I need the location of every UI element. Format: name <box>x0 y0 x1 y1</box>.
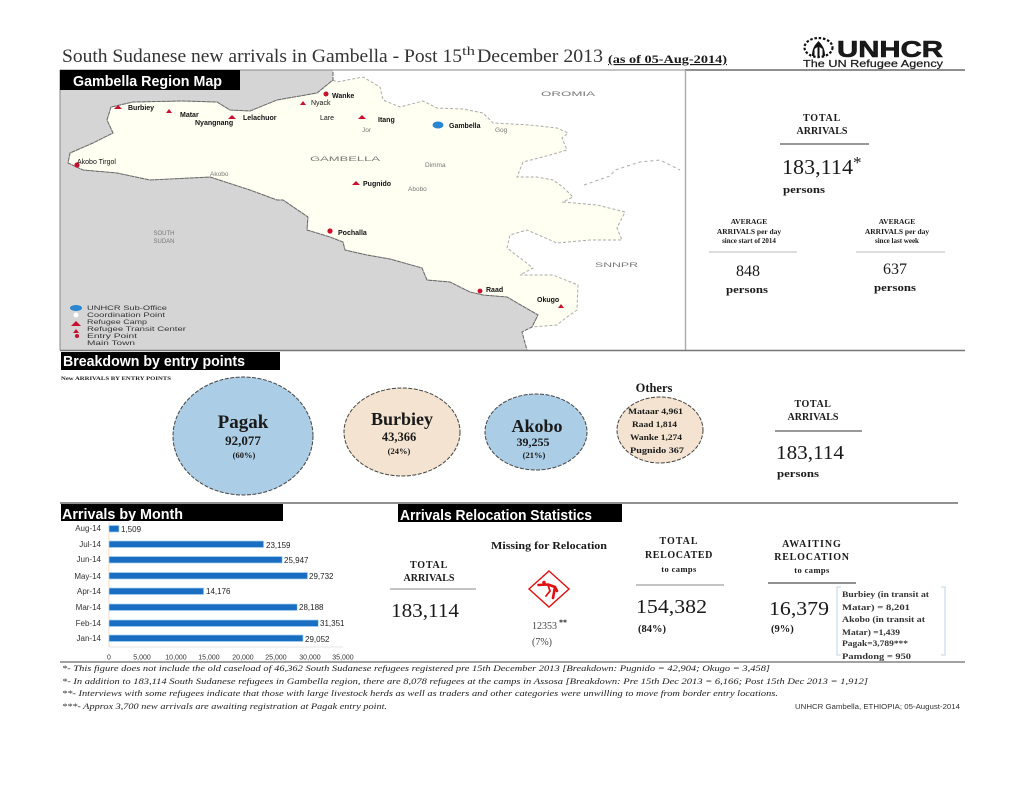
bar: Jan-14 <box>77 634 330 644</box>
map legend: Entry Point <box>87 334 138 340</box>
footnotes: *- This figure does not include the old caseload of 46,362 South Sudanese refugees registered pre 15th December 2013 [Breakdown: Pugnido = 42,904; Okugo = 3,458] <box>62 663 770 673</box>
map: place labels: SUDAN <box>153 239 175 245</box>
bubble: Burbiey <box>344 388 460 476</box>
bar: Jan-14: 29,052 <box>305 635 330 644</box>
panel: average arrivals since last week: persons <box>874 283 916 294</box>
map: place labels: Itang <box>378 117 395 124</box>
title <box>62 43 727 67</box>
heading: Arrivals Relocation Statistics: Arrivals Relocation Statistics <box>400 507 592 524</box>
panel: awaiting relocation: (9%) <box>771 624 794 635</box>
map: place labels: Gambella <box>449 123 481 130</box>
callout: awaiting relocation breakdown: Pamdong = 950 <box>842 651 911 661</box>
panel: total relocated <box>636 536 724 635</box>
map: place labels: Nyack <box>311 100 331 107</box>
map legend: Coordination Point <box>87 313 166 319</box>
map: place labels: GAMBELLA <box>310 156 381 163</box>
panel: total relocated: to camps <box>661 564 697 574</box>
panel: average arrivals since last week: AVERAGE <box>879 217 915 226</box>
map: place labels: Raad <box>486 287 503 294</box>
icon: UNHCR emblem <box>804 38 832 57</box>
map: place labels: OROMIA <box>541 91 596 98</box>
icon: UNHCR office marker <box>432 122 444 128</box>
bar: Feb-14: 31,351 <box>320 619 345 628</box>
map: place labels: Burbiey <box>128 105 154 112</box>
bar: Jun-14: Jun-14 <box>77 555 102 564</box>
bar chart: arrivals by month <box>74 522 354 662</box>
map frame rules <box>60 70 965 350</box>
map: place labels: Gog <box>495 127 508 134</box>
bar: Apr-14: 14,176 <box>206 587 231 596</box>
callout: awaiting relocation breakdown: Burbiey (in transit at <box>842 589 929 599</box>
panel: total arrivals summary <box>780 113 869 196</box>
map: place labels: Matar <box>180 112 199 119</box>
panel: average arrivals since start of 2014: since start of 2014 <box>722 237 776 245</box>
chart axis labels: 20,000 <box>232 654 254 662</box>
panel: missing for relocation: Missing for Relocation <box>491 541 608 552</box>
title: th <box>462 43 476 58</box>
callout: awaiting relocation breakdown: Matar) = 8,201 <box>842 602 910 612</box>
panel: average arrivals since start of 2014: persons <box>726 285 768 296</box>
bar: May-14: 29,732 <box>309 572 334 581</box>
map: place labels: Lare <box>320 115 334 122</box>
map legend <box>70 305 186 347</box>
bar: Aug-14: Aug-14 <box>75 524 102 533</box>
map legend: Main Town <box>87 341 135 347</box>
chart axis labels: 35,000 <box>332 654 354 662</box>
panel: total relocated: (84%) <box>638 624 666 635</box>
panel: Gambella region map <box>60 70 685 350</box>
panel: awaiting relocation: AWAITING <box>782 539 842 550</box>
bar: Jan-14: Jan-14 <box>77 634 102 643</box>
footnotes <box>62 663 868 711</box>
title: (as of 05-Aug-2014) <box>608 54 727 66</box>
panel: breakdown total arrivals: TOTAL <box>794 399 832 410</box>
map: place labels: Akobo Tirgol <box>77 159 116 166</box>
panel: average arrivals since last week: since last week <box>875 237 919 245</box>
panel: breakdown total arrivals: ARRIVALS <box>788 412 839 423</box>
bubble: Others: Wanke 1,274 <box>630 432 683 442</box>
heading: Gambella Region Map: Gambella Region Map <box>73 73 222 90</box>
bubble: Akobo: (21%) <box>523 450 545 460</box>
panel: missing for relocation: 12353 <box>532 621 557 632</box>
bubble: Others: Raad 1,814 <box>632 419 678 429</box>
title: December 2013 <box>477 46 603 67</box>
map: place labels: Pugnido <box>363 181 391 188</box>
panel: average arrivals since last week: 637 <box>883 261 907 278</box>
footnotes: ***- Approx 3,700 new arrivals are awaiting registration at Pagak entry point. <box>62 701 387 711</box>
map: place markers <box>74 92 564 308</box>
panel: awaiting relocation: 16,379 <box>769 598 829 620</box>
bar: Jun-14: 25,947 <box>284 556 309 565</box>
panel: breakdown total arrivals: persons <box>777 469 819 480</box>
panel: total arrivals summary: 183,114 <box>782 155 854 179</box>
map: place labels: Jor <box>362 127 372 134</box>
map: place labels: Akobo <box>210 171 229 178</box>
panel: breakdown total arrivals: 183,114 <box>776 442 844 464</box>
bubble: Burbiey: (24%) <box>388 446 410 456</box>
bubble: Pagak: (60%) <box>233 450 255 460</box>
bubble: Akobo <box>485 394 587 470</box>
panel: missing for relocation: (7%) <box>532 637 552 648</box>
heading: Breakdown by entry points: Breakdown by entry points <box>63 353 245 370</box>
panel: breakdown total arrivals <box>775 399 862 480</box>
panel: total arrivals summary: ARRIVALS <box>797 126 848 137</box>
panel: total arrivals summary: persons <box>783 185 825 196</box>
panel: awaiting relocation <box>768 539 856 635</box>
chart axis labels: 30,000 <box>299 654 321 662</box>
panel: average arrivals since last week <box>856 217 945 294</box>
callout: awaiting relocation breakdown: Pagak=3,789*** <box>842 638 908 648</box>
bar: May-14: May-14 <box>74 572 102 581</box>
title: South Sudanese new arrivals in Gambella - Post 15 <box>62 46 462 67</box>
chart axis labels: 15,000 <box>198 654 220 662</box>
bar: Jul-14: Jul-14 <box>79 540 102 549</box>
panel: missing for relocation <box>491 541 608 648</box>
panel: total relocated: TOTAL <box>659 536 699 547</box>
bar: Feb-14 <box>76 619 345 628</box>
chart axis labels: 0 <box>107 654 111 662</box>
map: place labels: Dimma <box>425 162 446 169</box>
panel: total relocated: RELOCATED <box>645 550 713 561</box>
chart axis labels: 25,000 <box>265 654 287 662</box>
map: neighbouring boundary <box>584 160 680 185</box>
bar: Jun-14 <box>77 555 309 565</box>
credit line: UNHCR Gambella, ETHIOPIA; 05-August-2014 <box>795 704 960 711</box>
panel: relocation total arrivals: TOTAL <box>410 560 448 571</box>
heading: Arrivals by Month: Arrivals by Month <box>62 506 183 523</box>
logo: UNHCR: UNHCR <box>837 36 943 62</box>
map: place labels: Okugo <box>537 297 559 304</box>
bar: Jul-14: 23,159 <box>266 541 291 550</box>
panel: relocation total arrivals: ARRIVALS <box>404 573 455 584</box>
heading: Arrivals by Month <box>61 504 283 523</box>
bubble: Others: Others <box>636 381 673 395</box>
bubble: Pagak <box>173 377 313 495</box>
bar: Aug-14: 1,509 <box>121 525 142 534</box>
bubble: Akobo: 39,255 <box>516 435 550 449</box>
bubble: Pagak: 92,077 <box>225 433 261 448</box>
bubble: Others: Pugnido 367 <box>630 445 685 455</box>
panel: total relocated: 154,382 <box>636 596 707 618</box>
panel: relocation total arrivals <box>390 560 476 622</box>
panel: average arrivals since start of 2014: 848 <box>736 263 760 280</box>
panel: average arrivals since start of 2014: AVERAGE <box>731 217 767 226</box>
panel: total arrivals summary: * <box>853 153 862 172</box>
bar: Aug-14 <box>75 524 142 534</box>
subheading: new arrivals by entry points: New ARRIVALS BY ENTRY POINTS <box>61 376 171 382</box>
panel: average arrivals since last week: ARRIVALS per day <box>865 227 929 236</box>
map: Gambella region <box>68 77 625 327</box>
panel: average arrivals since start of 2014 <box>709 217 797 296</box>
map legend: Refugee Transit Center <box>87 327 186 333</box>
footnotes: *- In addition to 183,114 South Sudanese refugees in Gambella region, there are 8,078 refugees at the camps in Assosa [Breakdown: Pre 15th Dec 2013 = 6,166; Post 15th Dec 2013 = 1,912] <box>62 676 868 686</box>
map: place labels <box>77 91 639 304</box>
map: shared border with South Sudan <box>68 72 538 350</box>
map: place labels: SOUTH <box>154 231 174 237</box>
footnotes: **- Interviews with some refugees indicate that those with large livestock herds as well as traders and other categories were unwilling to move from border entry locations. <box>62 688 778 698</box>
map legend: UNHCR Sub-Office <box>87 306 168 312</box>
map: South Sudan grey area <box>60 70 538 350</box>
map: place labels: Wanke <box>332 93 354 100</box>
map: place labels: Pochalla <box>338 230 367 237</box>
bar: Apr-14: Apr-14 <box>77 587 102 596</box>
bar: Apr-14 <box>77 587 231 596</box>
map: place labels: Lelachuor <box>243 115 277 122</box>
bubble: Others <box>617 381 703 463</box>
panel: average arrivals since start of 2014: ARRIVALS per day <box>717 227 781 236</box>
map: place labels: Abobo <box>408 186 427 193</box>
panel: awaiting relocation: RELOCATION <box>774 552 850 563</box>
chart axis labels: 5,000 <box>133 654 151 662</box>
panel: missing for relocation: ** <box>559 618 567 627</box>
bar: May-14 <box>74 572 334 581</box>
bar: Feb-14: Feb-14 <box>76 619 102 628</box>
map: place labels: Nyangnang <box>195 120 233 127</box>
bubble: Others: Mataar 4,961 <box>628 406 683 416</box>
panel: total arrivals summary: TOTAL <box>803 113 841 124</box>
chart axis labels <box>107 654 354 662</box>
bar: Mar-14: 28,188 <box>299 603 324 612</box>
bar: Mar-14: Mar-14 <box>76 603 102 612</box>
callout: awaiting relocation breakdown: Akobo (in transit at <box>842 614 925 624</box>
callout: awaiting relocation breakdown: Matar) =1,439 <box>842 627 900 637</box>
panel: awaiting relocation: to camps <box>794 565 830 575</box>
bubble: Burbiey: 43,366 <box>382 430 416 444</box>
logo: UNHCR: The UN Refugee Agency <box>803 58 944 70</box>
panel: relocation total arrivals: 183,114 <box>391 600 459 622</box>
callout: awaiting relocation breakdown <box>837 587 945 661</box>
bar: Jul-14 <box>79 540 291 550</box>
bubble: Pagak: Pagak <box>218 412 269 433</box>
bubble: Burbiey: Burbiey <box>371 409 433 429</box>
bubble: Akobo: Akobo <box>511 416 563 436</box>
map legend: Refugee Camp <box>87 320 148 326</box>
bar: Mar-14 <box>76 603 324 612</box>
logo: UNHCR <box>803 36 944 70</box>
icon: red diamond with falling figure <box>529 571 569 607</box>
map: place labels: SNNPR <box>595 262 639 269</box>
chart axis labels: 10,000 <box>165 654 187 662</box>
